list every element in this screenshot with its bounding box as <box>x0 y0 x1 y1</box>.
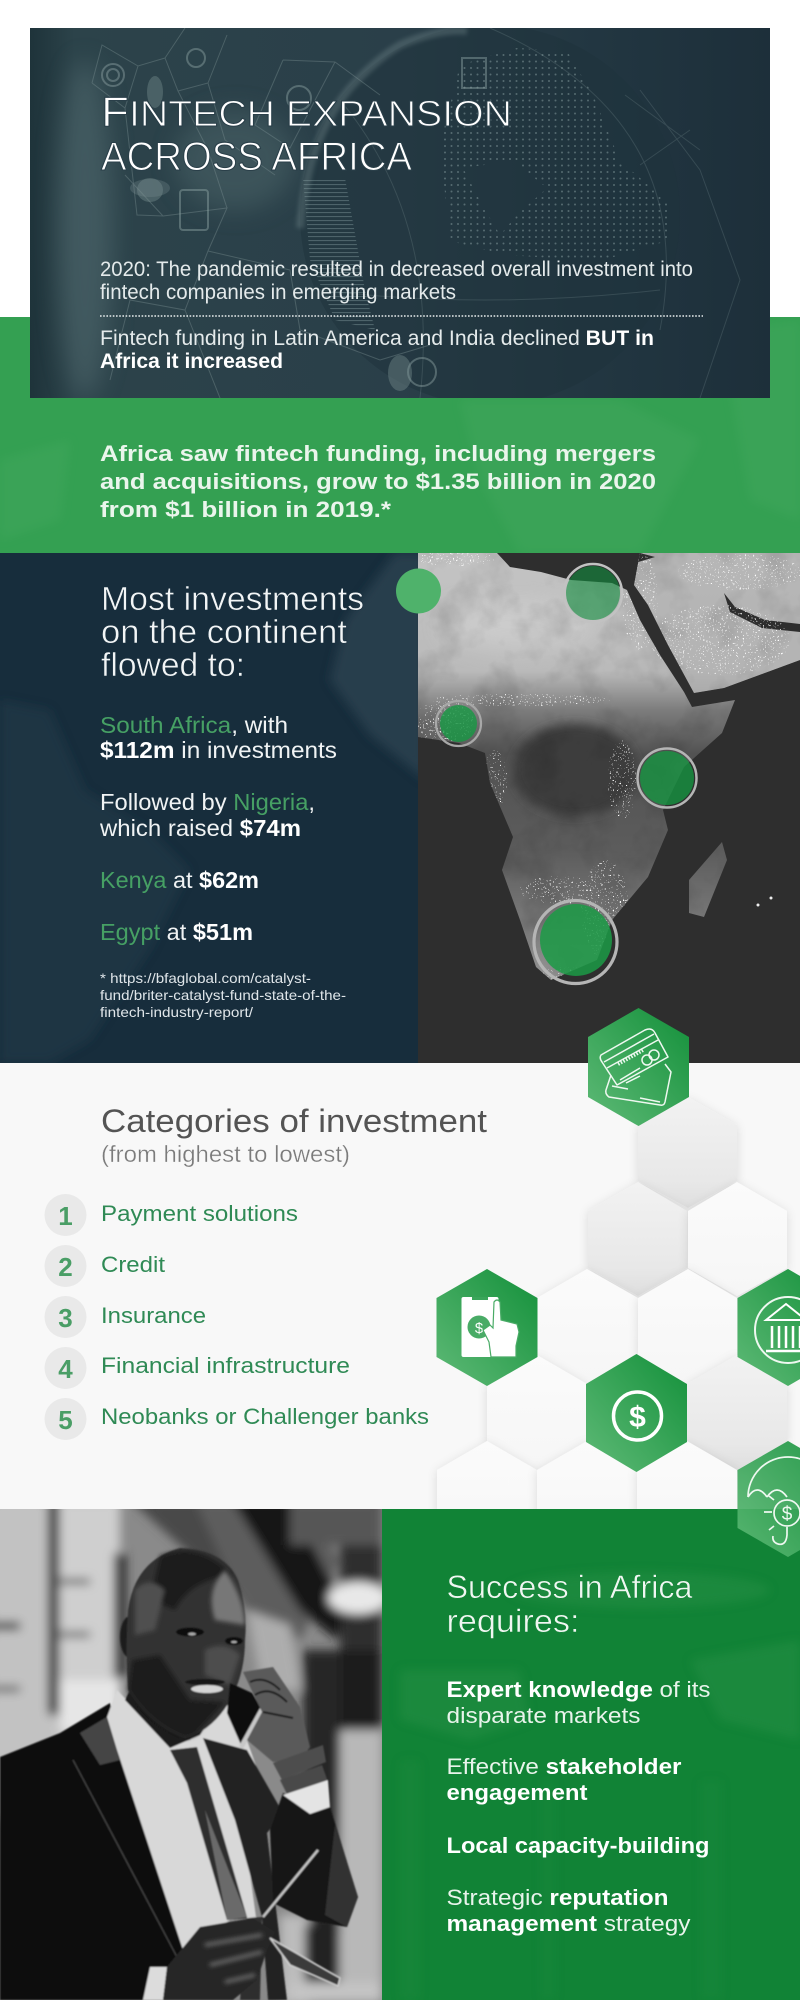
globe and network background <box>57 25 740 405</box>
text: stakeholder engagement: Effective stakeholder <box>446 1754 682 1779</box>
icon: mobile payment hexagon <box>436 1269 538 1386</box>
bag strap <box>203 1738 287 2000</box>
text: reputation management: management strategy <box>446 1911 690 1936</box>
marker: South Africa <box>534 900 617 984</box>
item 2: credit: 2 <box>58 1252 73 1282</box>
item 3: insurance: 3 <box>58 1303 73 1333</box>
panel: categories of investment <box>0 1063 800 1558</box>
text: pandemic intro <box>100 258 693 304</box>
text: funding comparison: Fintech funding in Latin America and India declined BUT in <box>100 327 654 350</box>
item 1: payment solutions: 1 <box>58 1201 73 1231</box>
heading: success <box>446 1569 693 1639</box>
background: white page top <box>0 0 800 317</box>
text: subheading: (from highest to lowest) <box>101 1141 350 1167</box>
photo: businessman on phone <box>0 1500 388 2000</box>
icon: dollar coin hexagon: $ <box>629 1401 646 1434</box>
item 4: financial infrastructure: Financial infrastructure <box>101 1353 350 1378</box>
icon: umbrella hexagon <box>738 1441 800 1557</box>
text: stakeholder engagement <box>446 1754 682 1805</box>
text: South Africa: $112m in investments <box>100 737 337 763</box>
item 4: financial infrastructure: 4 <box>58 1354 73 1384</box>
list: ranked categories <box>44 1194 429 1440</box>
heading: success: Success in Africa <box>446 1569 693 1605</box>
panel: title card <box>30 25 770 405</box>
panel: success in Africa <box>382 1509 800 2000</box>
head <box>120 1548 246 1738</box>
phone hand <box>227 1667 330 1814</box>
marker: Nigeria <box>436 701 481 746</box>
text: source footnote: fintech-industry-report/ <box>100 1004 253 1020</box>
panel: green funding band <box>0 317 800 553</box>
heading: title: ACROSS AFRICA <box>101 135 412 179</box>
jacket <box>0 1703 190 2000</box>
tie <box>170 1747 262 2000</box>
text: Egypt: Egypt at $51m <box>100 919 253 945</box>
item 5: neobanks <box>44 1398 429 1440</box>
text: South Africa <box>100 712 337 763</box>
text: reputation management <box>446 1885 690 1936</box>
item 3: insurance: Insurance <box>101 1303 206 1328</box>
marker: decorative green dot <box>396 568 441 614</box>
item 5: neobanks: 5 <box>58 1405 73 1435</box>
item 2: credit: Credit <box>101 1252 166 1277</box>
text: Nigeria: which raised $74m <box>99 815 301 841</box>
blurred office background <box>0 1500 388 2000</box>
text: Nigeria: Followed by Nigeria, <box>100 789 315 815</box>
text: funding statement <box>100 441 656 522</box>
heading: most investments <box>101 581 364 684</box>
text: Kenya: Kenya at $62m <box>100 867 259 893</box>
item 5: neobanks: Neobanks or Challenger banks <box>101 1404 429 1429</box>
panel: investments navy column <box>0 553 425 1063</box>
item 1: payment solutions <box>44 1194 298 1236</box>
icon: dollar coin hexagon <box>586 1354 687 1472</box>
text: expert knowledge <box>446 1677 710 1728</box>
shirt <box>107 1690 268 1950</box>
heading: most investments: Most investments <box>101 581 364 618</box>
man figure <box>0 1548 358 2000</box>
text: source footnote: * https://bfaglobal.com/catalyst- <box>100 970 311 986</box>
item 2: credit <box>44 1245 166 1287</box>
hexagon grid <box>437 1097 787 1558</box>
heading: most investments: on the continent <box>101 614 348 651</box>
item 3: insurance <box>44 1296 206 1338</box>
panel: Africa map <box>418 553 800 1063</box>
text: funding statement: and acquisitions, grow to $1.35 billion in 2020 <box>100 469 656 494</box>
marker: Egypt <box>564 564 622 622</box>
icon: mobile payment hexagon: $ <box>475 1320 484 1337</box>
icon: credit cards hexagon <box>588 1008 689 1126</box>
text: funding statement: from $1 billion in 2019.* <box>100 497 391 522</box>
text: source footnote: fund/briter-catalyst-fund-state-of-the- <box>100 987 346 1003</box>
text: capacity building: Local capacity-building <box>446 1833 710 1858</box>
item 4: financial infrastructure <box>44 1347 350 1389</box>
item 1: payment solutions: Payment solutions <box>101 1201 298 1226</box>
text: expert knowledge: disparate markets <box>446 1703 640 1728</box>
neck <box>124 1692 204 1749</box>
text: pandemic intro: fintech companies in emerging markets <box>100 281 456 304</box>
icon: bank hexagon <box>738 1269 800 1386</box>
text: Nigeria <box>99 789 315 841</box>
text: reputation management: Strategic reputation <box>446 1885 668 1910</box>
glasses hand <box>143 1850 340 2000</box>
heading: title <box>101 88 512 179</box>
text: expert knowledge: Expert knowledge of its <box>446 1677 710 1702</box>
heading: success: requires: <box>446 1603 580 1639</box>
text: funding comparison <box>100 327 654 373</box>
map: landmass of Africa, Arabia and Madagascar <box>418 553 800 993</box>
text: South Africa: South Africa , with <box>100 712 288 738</box>
text: source footnote <box>100 970 346 1020</box>
marker: Kenya <box>638 748 696 808</box>
heading: categories: Categories of investment <box>101 1103 487 1139</box>
heading: most investments: flowed to: <box>101 647 245 684</box>
text: funding statement: Africa saw fintech funding, including mergers <box>100 441 656 466</box>
right sleeve <box>270 1793 358 1927</box>
icon: umbrella hexagon: $ <box>782 1504 793 1525</box>
heading: title: FINTECH EXPANSION <box>101 88 512 135</box>
text: stakeholder engagement: engagement <box>446 1780 588 1805</box>
text: funding comparison: Africa it increased <box>100 350 283 373</box>
text: pandemic intro: 2020: The pandemic resulted in decreased overall investment into <box>100 258 693 281</box>
